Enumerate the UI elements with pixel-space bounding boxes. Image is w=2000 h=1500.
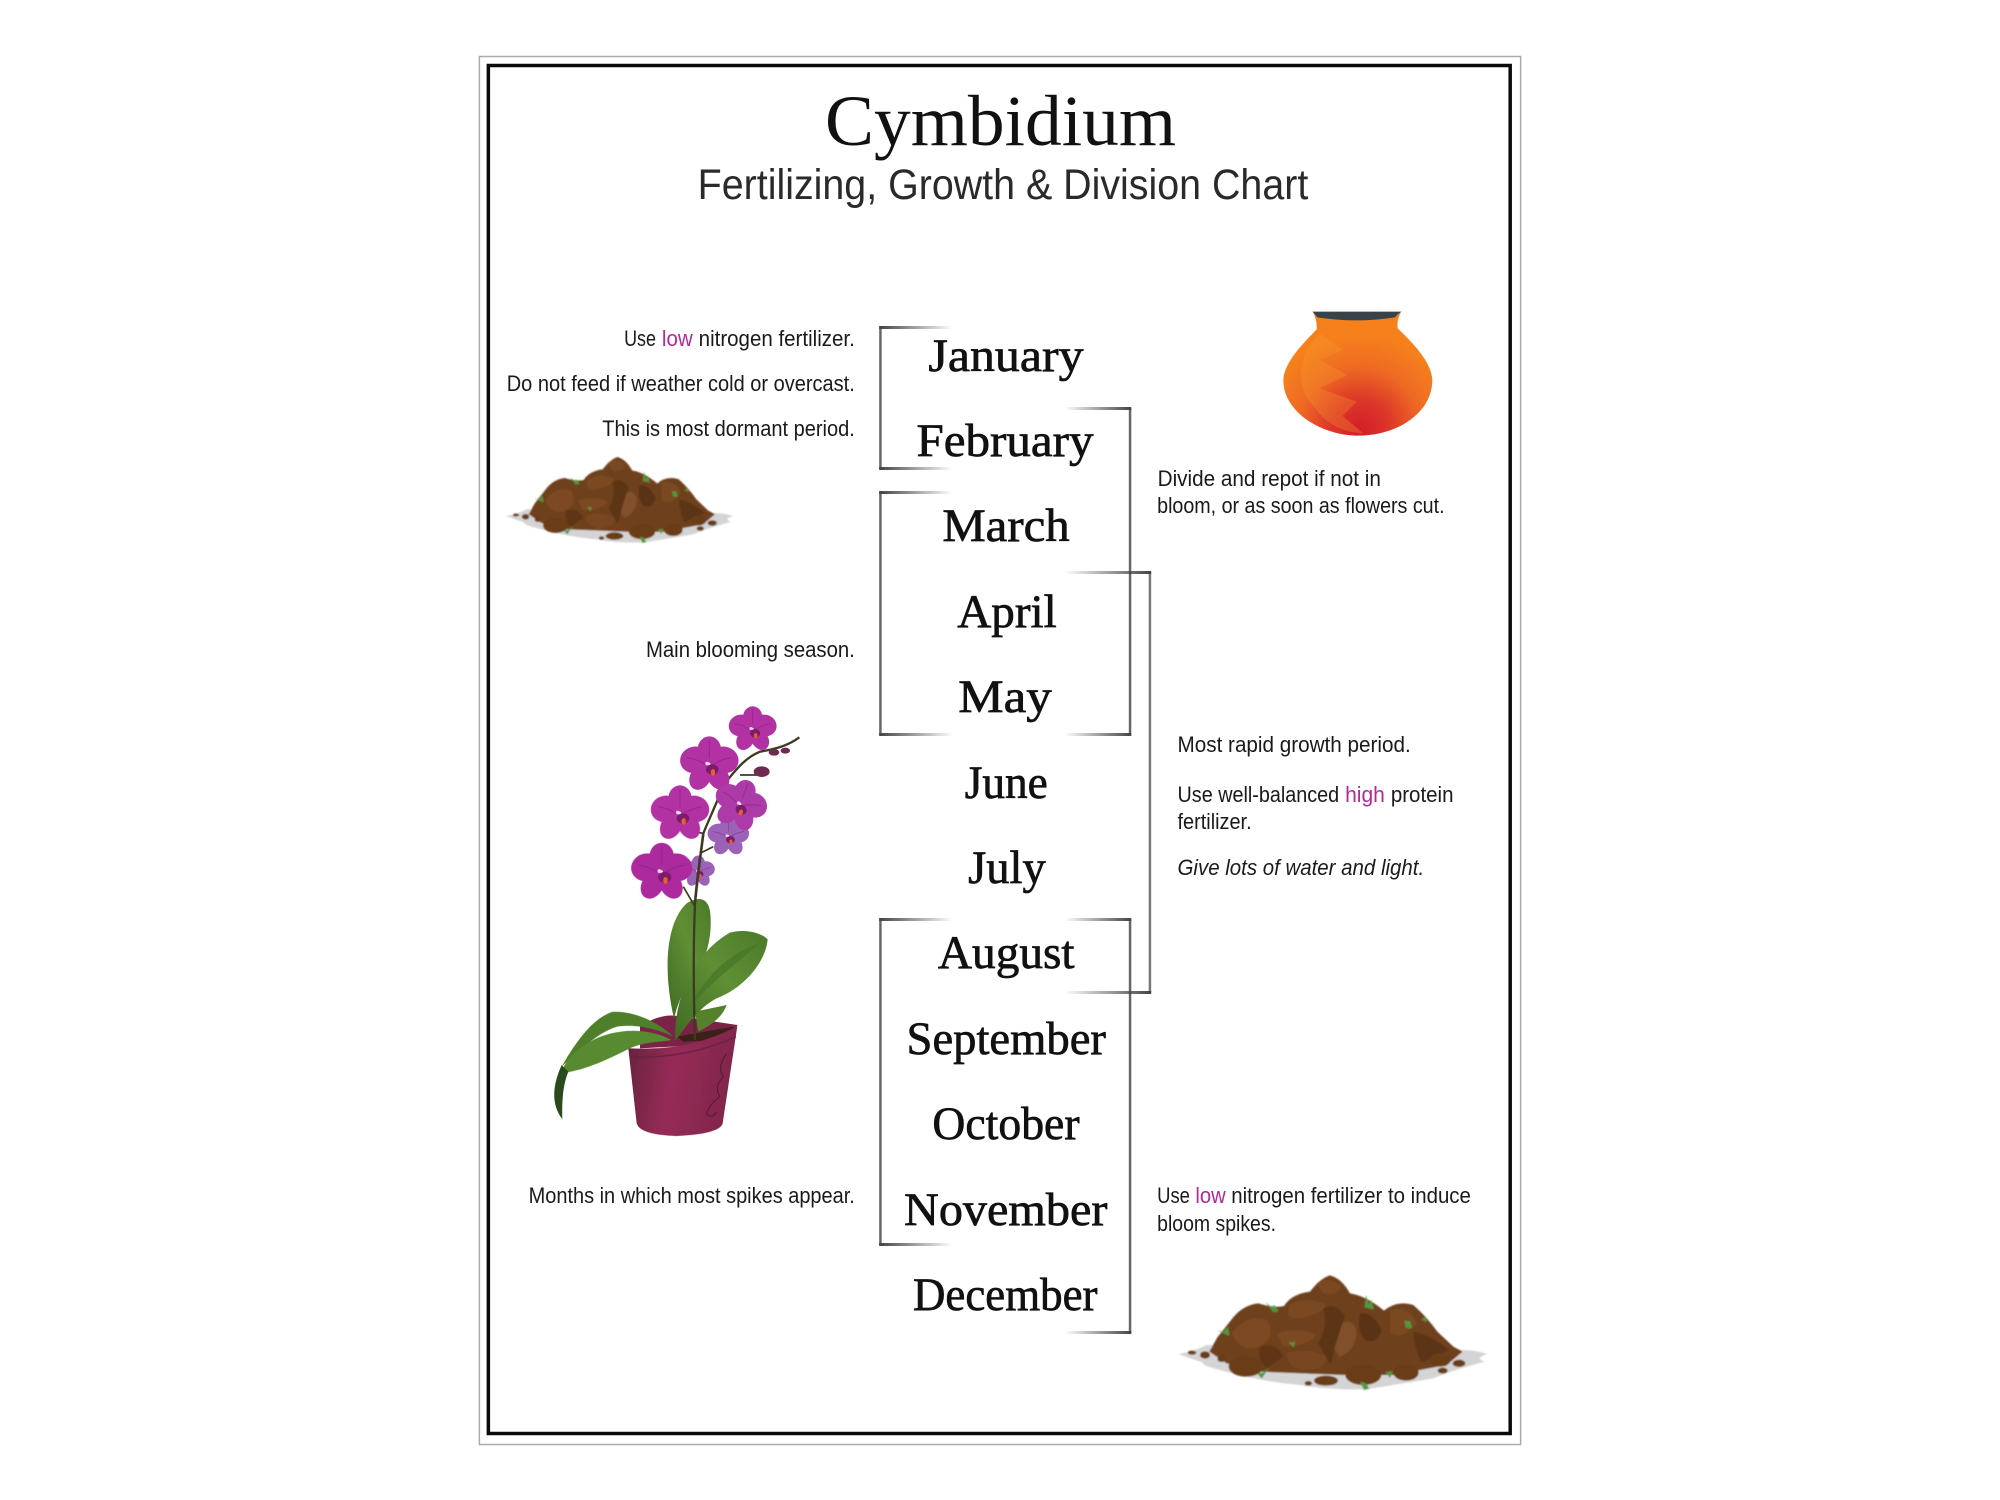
- month: September: September: [907, 1013, 1106, 1065]
- illustration: orchid in pot: [554, 706, 799, 1136]
- text block: induce bloom spikes: bloom spikes.: [1157, 1211, 1276, 1236]
- icon: large soil pile: [1178, 1275, 1487, 1390]
- text block: growth period: high: [1345, 782, 1385, 807]
- text block: induce bloom spikes: low: [1195, 1183, 1226, 1208]
- text block: growth period: fertilizer.: [1178, 809, 1252, 834]
- text block: winter fertilizer notes: nitrogen fertilizer.: [699, 326, 855, 351]
- text block: growth period: protein: [1391, 782, 1454, 807]
- text block: winter fertilizer notes: This is most dormant period.: [602, 416, 855, 441]
- lavender blooms: [680, 856, 717, 888]
- subtitle: Fertilizing, Growth & Division Chart: [698, 161, 1308, 209]
- text block: winter fertilizer notes: Do not feed if weather cold or overcast.: [507, 371, 855, 396]
- text block: growth period: Give lots of water and light.: [1178, 855, 1424, 880]
- text: main blooming season: Main blooming season.: [646, 637, 855, 662]
- text block: divide and repot: Divide and repot if not in: [1158, 466, 1381, 491]
- text block: induce bloom spikes: nitrogen fertilizer to induce: [1231, 1183, 1471, 1208]
- text block: winter fertilizer notes: low: [662, 326, 693, 351]
- back leaf: [668, 899, 711, 1018]
- month: December: December: [913, 1269, 1098, 1321]
- text: spikes: Months in which most spikes appear.: [529, 1183, 855, 1208]
- buds: [754, 766, 770, 777]
- text block: growth period: Most rapid growth period.: [1178, 732, 1411, 757]
- poster layout: frames, headings, months and notes: [479, 56, 1521, 1444]
- text block: winter fertilizer notes: Use: [624, 326, 656, 351]
- text block: growth period: [1178, 732, 1454, 880]
- text block: induce bloom spikes: [1157, 1183, 1471, 1236]
- month: May: May: [958, 671, 1052, 723]
- month: January: January: [928, 330, 1084, 382]
- text block: divide and repot: [1157, 466, 1445, 518]
- month: March: March: [942, 500, 1070, 552]
- month: February: February: [916, 415, 1094, 467]
- inner black frame: [488, 66, 1510, 1434]
- front leaf: [675, 931, 768, 1041]
- month: August: August: [938, 927, 1075, 979]
- outer frame: [479, 56, 1521, 1444]
- orchid pot back rim: [640, 1016, 737, 1048]
- text block: divide and repot: bloom, or as soon as flowers cut.: [1157, 493, 1445, 518]
- icon: small soil pile: [506, 457, 733, 543]
- stem: [694, 737, 799, 1040]
- text block: induce bloom spikes: Use: [1157, 1183, 1190, 1208]
- month: July: July: [968, 842, 1046, 894]
- text block: growth period: Use well-balanced: [1178, 782, 1339, 807]
- left leaves: [562, 1012, 673, 1067]
- magenta blooms: [726, 706, 779, 753]
- month: October: October: [932, 1098, 1080, 1150]
- text block: winter fertilizer notes: [507, 326, 855, 441]
- month: June: June: [965, 757, 1048, 809]
- month: November: November: [904, 1184, 1108, 1236]
- pot: [628, 1026, 737, 1136]
- title: Cymbidium: [825, 81, 1176, 161]
- icon: orange clay pot: [1283, 312, 1432, 436]
- month: April: April: [957, 586, 1057, 638]
- brackets: [879, 326, 1151, 1334]
